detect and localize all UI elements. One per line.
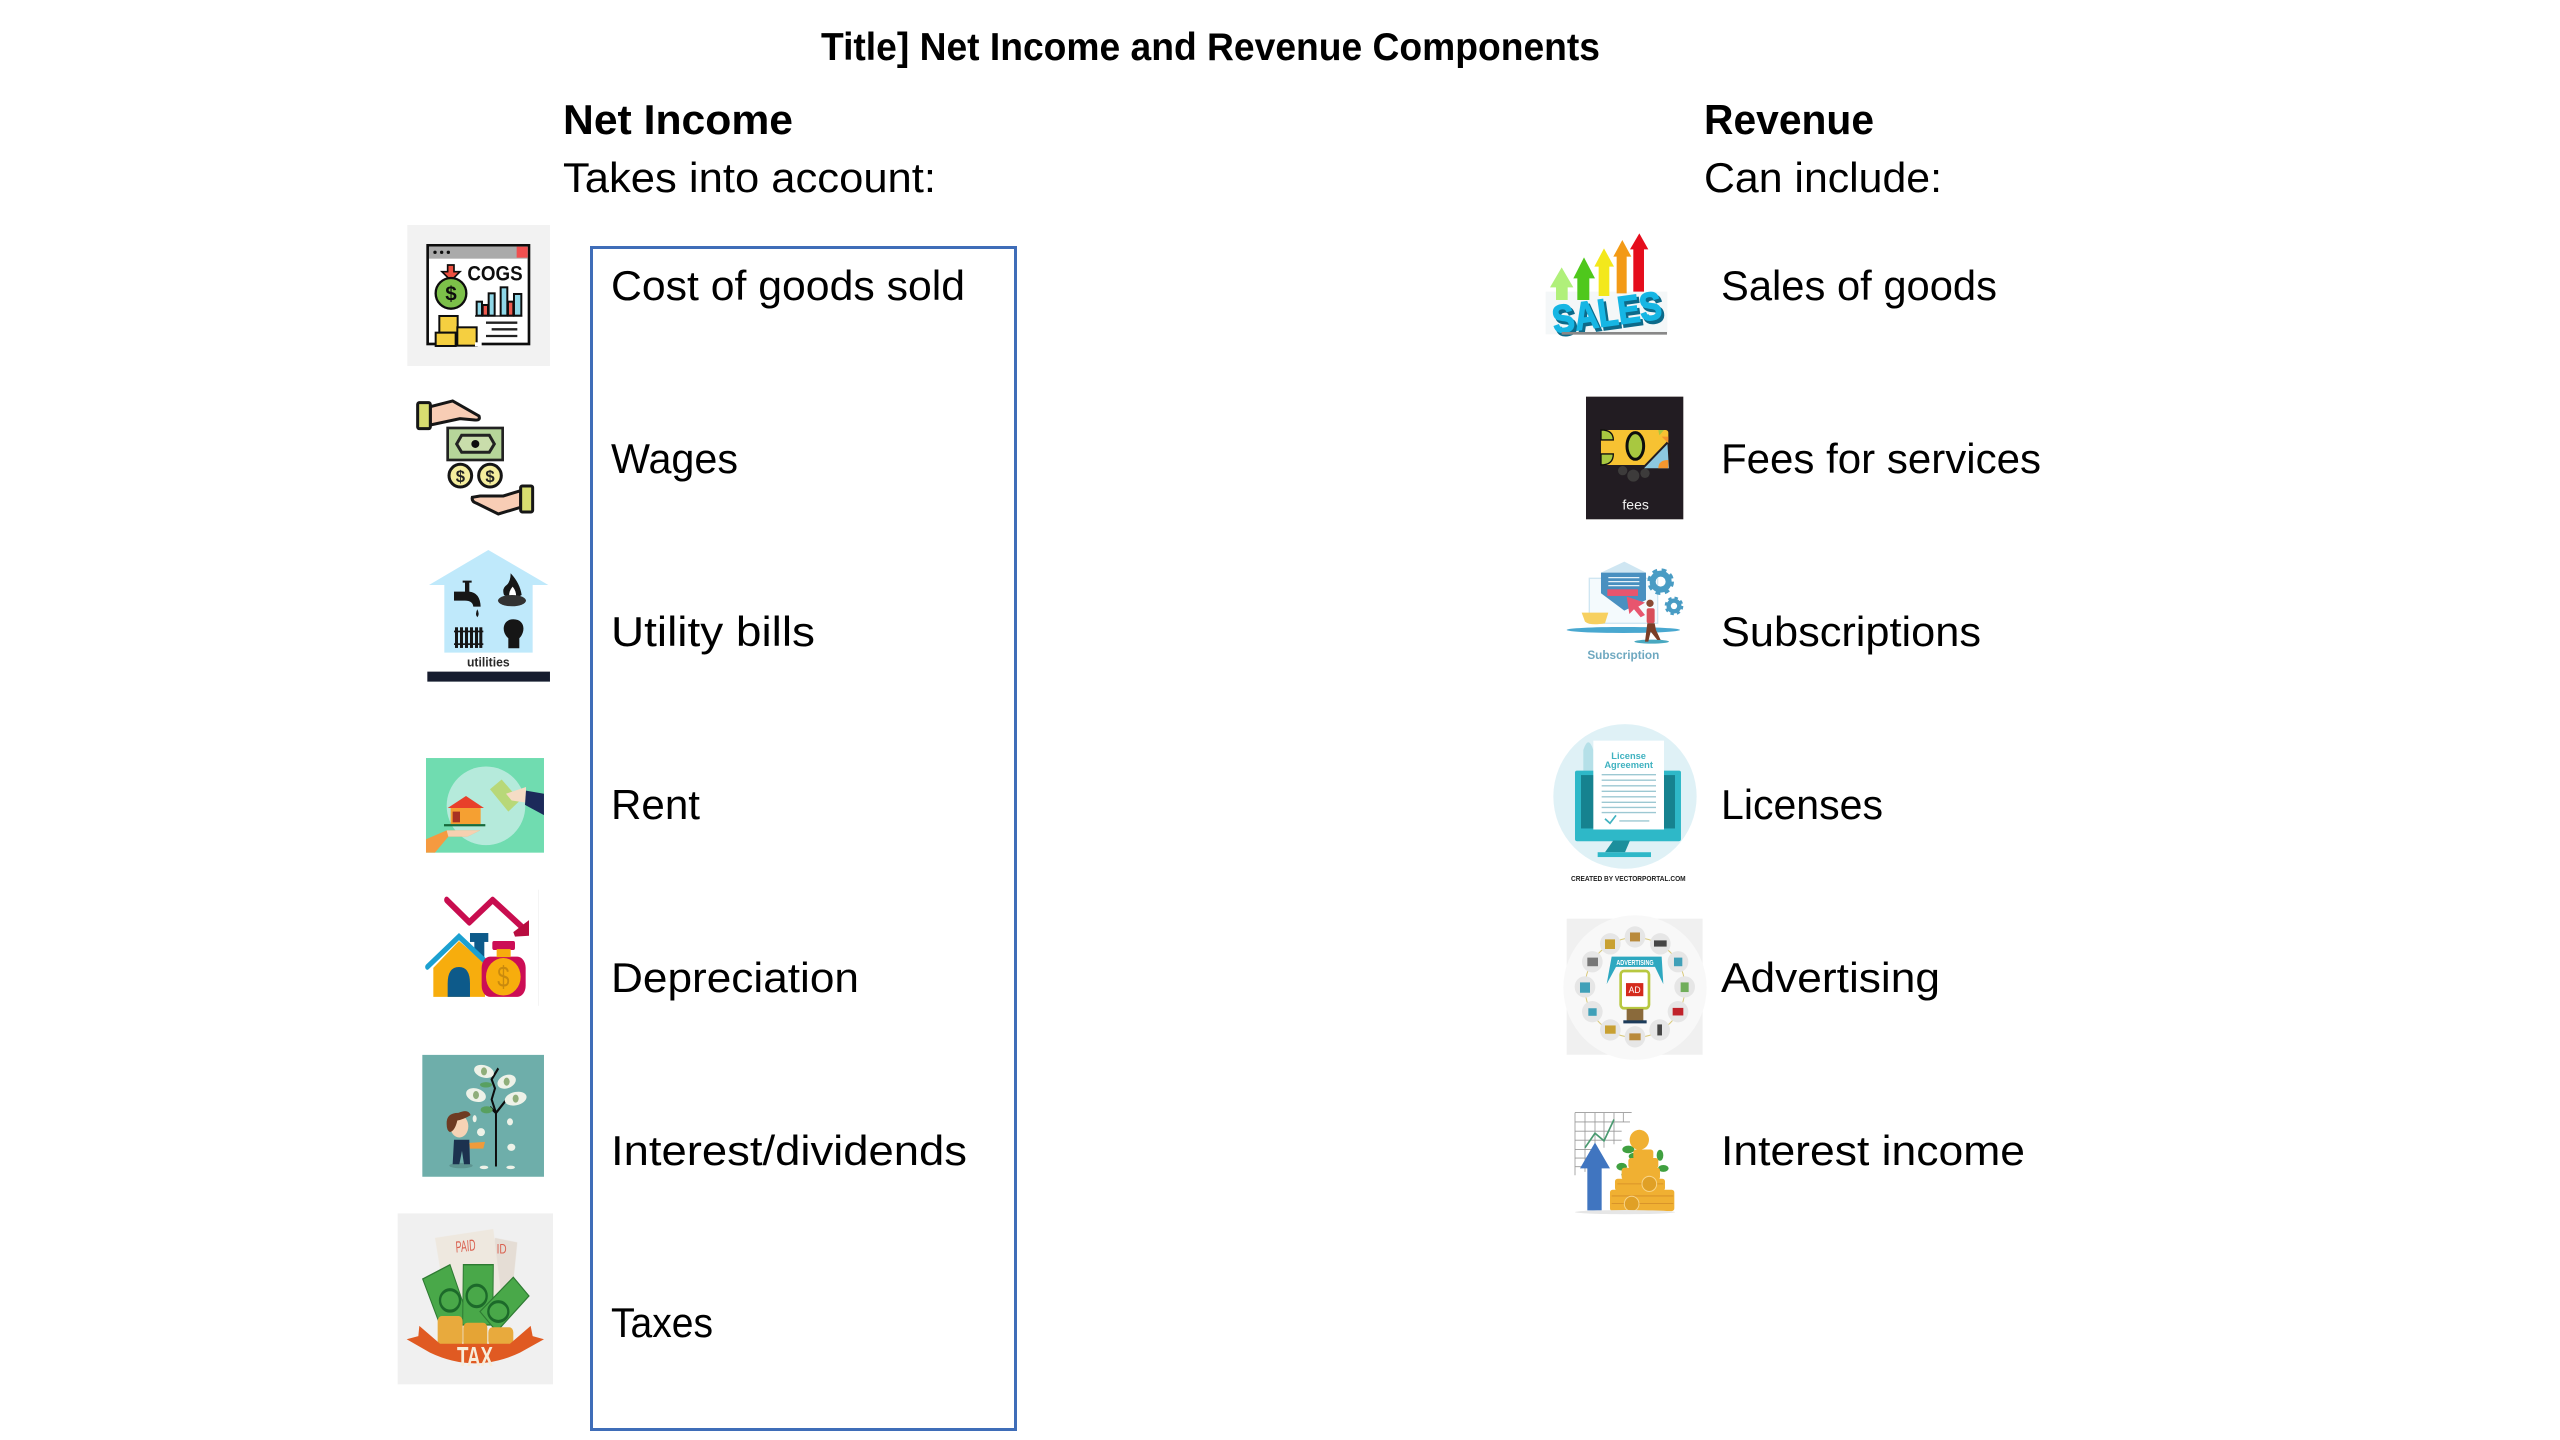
heading: revenue: Revenue <box>1704 96 1874 143</box>
icon: wages: $ <box>485 467 495 486</box>
icon: license agreement <box>1553 724 1697 883</box>
list box outline <box>592 248 1016 1430</box>
icon: wages <box>418 401 533 514</box>
icon: sales: SALES <box>1549 284 1664 342</box>
heading: net income: Net Income <box>563 96 793 143</box>
icon: COGS: COGS <box>467 262 523 286</box>
icon: fees: fees <box>1622 497 1649 513</box>
icon: advertising: AD <box>1629 985 1641 995</box>
list: net income items: Rent <box>611 781 700 828</box>
list: revenue items: Subscriptions <box>1721 608 1981 655</box>
icon: fees <box>1586 397 1683 519</box>
icon: license agreement: Agreement <box>1604 760 1654 771</box>
panel: net income <box>563 96 1016 1430</box>
icon: depreciation <box>427 890 539 1006</box>
icon: subscription <box>1567 562 1682 662</box>
subheading: takes into account: Takes into account: <box>563 154 936 201</box>
list: net income items: Utility bills <box>611 608 815 655</box>
icon: interest and dividends <box>422 1055 544 1177</box>
list: net income items: Cost of goods sold <box>611 262 965 309</box>
icon: subscription: Subscription <box>1587 648 1659 662</box>
icon: utilities <box>427 550 550 682</box>
icon: wages: $ <box>456 467 466 486</box>
icon: COGS: $ <box>445 283 457 306</box>
icon: sales: SALES <box>1552 287 1667 345</box>
list: revenue items: Fees for services <box>1721 435 2041 482</box>
icon: sales <box>1546 233 1667 346</box>
icon: interest income <box>1575 1113 1675 1214</box>
list: net income items: Wages <box>611 435 738 482</box>
icon: advertising <box>1563 915 1707 1060</box>
list: net income items: Interest/dividends <box>611 1127 967 1174</box>
list: revenue items: Interest income <box>1721 1127 2025 1174</box>
list: net income items: Taxes <box>611 1299 713 1346</box>
icon: advertising: ADVERTISING <box>1616 960 1654 967</box>
icon: depreciation: $ <box>497 960 510 994</box>
icon: COGS <box>407 225 550 366</box>
list: revenue items: Advertising <box>1721 954 1940 1001</box>
list: revenue items <box>1721 262 2041 1174</box>
list: revenue items: Licenses <box>1721 781 1883 828</box>
icon: license agreement: CREATED BY VECTORPORTAL.COM <box>1571 876 1686 883</box>
subheading: can include: Can include: <box>1704 154 1942 201</box>
icon: tax: ID <box>497 1241 507 1257</box>
icon: rent <box>426 758 544 853</box>
icon: tax: TAX <box>457 1342 494 1373</box>
list: revenue items: Sales of goods <box>1721 262 1997 309</box>
title: Title] Net Income and Revenue Components <box>821 26 1600 69</box>
icon: license agreement: License <box>1611 751 1646 762</box>
icon: tax <box>398 1213 553 1384</box>
panel: revenue <box>1704 96 2041 1174</box>
list: net income items <box>611 262 967 1346</box>
list: net income items: Depreciation <box>611 954 859 1001</box>
icon: tax: PAID <box>455 1237 476 1257</box>
icon: utilities: utilities <box>467 655 510 669</box>
